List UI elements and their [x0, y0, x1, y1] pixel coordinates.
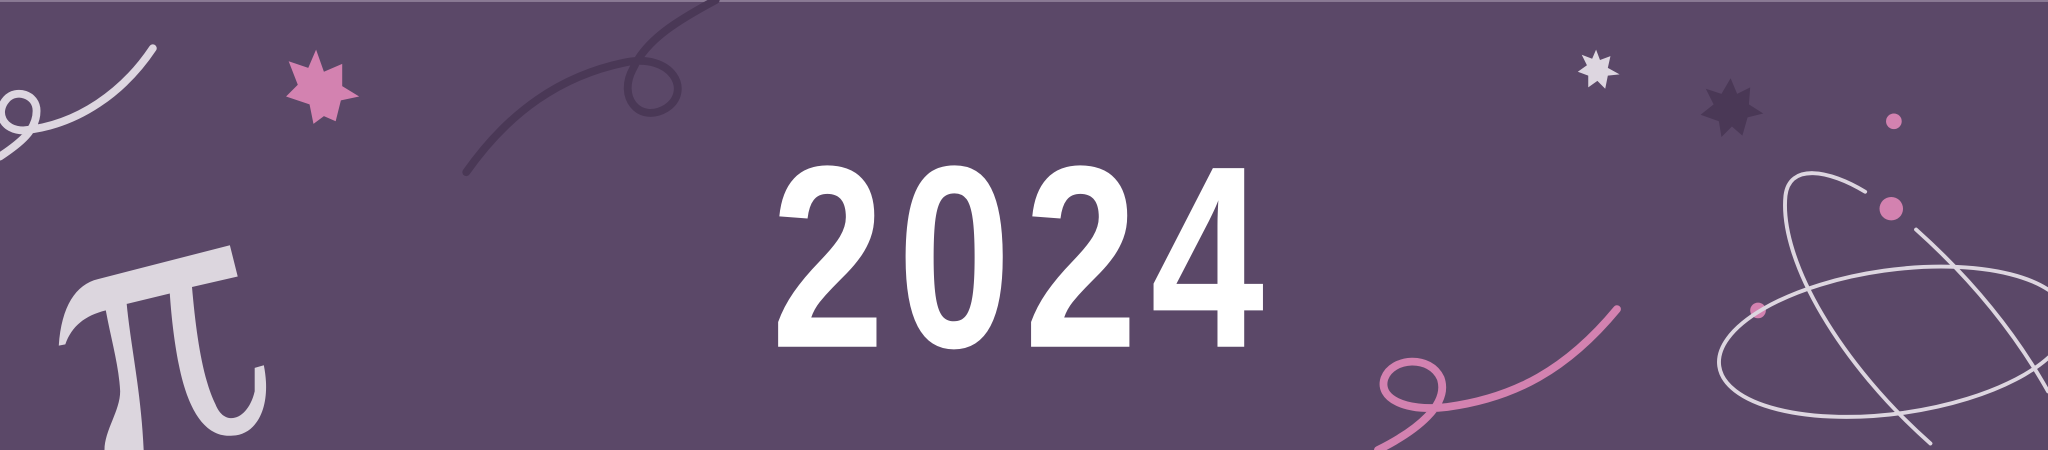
- swirl: dark: [466, 0, 716, 172]
- icon: atom orbits: [1709, 173, 2048, 443]
- title: 2024: 2024: [771, 113, 1277, 403]
- swirl: top-left light: [0, 48, 153, 157]
- icon: dark star: [1701, 78, 1763, 137]
- icon: pink star: [286, 50, 359, 124]
- swirl: pink bottom: [1378, 309, 1617, 450]
- icon: pi: [59, 245, 266, 450]
- pink dots: [1750, 113, 1903, 318]
- icon: small light star: [1578, 50, 1620, 89]
